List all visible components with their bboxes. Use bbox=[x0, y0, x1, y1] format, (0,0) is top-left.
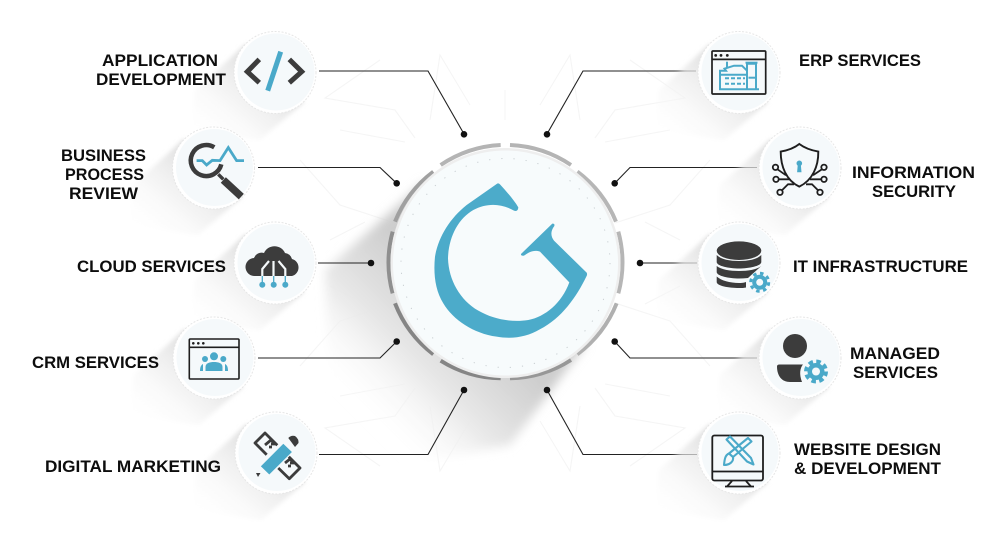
central disc shadow bbox=[325, 182, 586, 465]
label: information security: INFORMATION bbox=[852, 164, 975, 182]
service: crm services bbox=[129, 317, 255, 425]
label: crm services: CRM SERVICES bbox=[32, 354, 159, 372]
icon: person with gear bbox=[777, 334, 826, 382]
service: managed services bbox=[715, 317, 841, 425]
service: business process review bbox=[128, 127, 254, 235]
label: managed services: SERVICES bbox=[853, 364, 938, 382]
icon: magnifier with chart bbox=[191, 145, 244, 197]
service: application development bbox=[190, 32, 316, 140]
service: information security bbox=[715, 127, 841, 235]
central disc with logo bbox=[392, 149, 619, 377]
service: it infrastructure bbox=[654, 222, 780, 330]
logo: G mark bbox=[434, 183, 587, 338]
service: website design and development bbox=[654, 412, 780, 520]
service: cloud services bbox=[190, 222, 316, 330]
icon: window with factory bbox=[712, 51, 766, 94]
label: erp services: ERP SERVICES bbox=[799, 52, 921, 70]
icon: monitor with brush and pencil bbox=[712, 436, 763, 486]
icon: shield with circuits bbox=[773, 144, 827, 195]
label: digital marketing: DIGITAL MARKETING bbox=[45, 458, 221, 476]
label: information security bbox=[852, 164, 975, 201]
label: managed services bbox=[850, 345, 940, 382]
icon: code brackets bbox=[247, 52, 302, 91]
label: website design and development: WEBSITE DESIGN bbox=[794, 441, 941, 459]
label: business process review bbox=[61, 147, 146, 203]
label: application development: DEVELOPMENT bbox=[96, 71, 226, 89]
label: cloud services: CLOUD SERVICES bbox=[77, 258, 226, 276]
connector lines bbox=[258, 71, 757, 454]
label: website design and development: & DEVELOPMENT bbox=[794, 460, 941, 478]
label: application development: APPLICATION bbox=[102, 52, 218, 70]
icon: database with gear bbox=[717, 241, 771, 293]
label: business process review: BUSINESS bbox=[61, 147, 146, 165]
service: erp services bbox=[654, 32, 780, 140]
label: business process review: REVIEW bbox=[69, 185, 138, 203]
background circuit pattern bbox=[300, 55, 710, 471]
label: business process review: PROCESS bbox=[65, 166, 144, 184]
central segmented ring bbox=[389, 145, 622, 378]
icon: pencil and rulers bbox=[255, 433, 300, 479]
label: application development bbox=[96, 52, 226, 89]
icon: cloud network bbox=[245, 246, 299, 288]
icon: gear bbox=[749, 271, 771, 293]
label: information security: SECURITY bbox=[872, 183, 956, 201]
label: website design and development bbox=[794, 441, 941, 478]
label: managed services: MANAGED bbox=[850, 345, 940, 363]
icon: window with people bbox=[189, 339, 239, 379]
service: digital marketing bbox=[191, 412, 317, 520]
icon: gear bbox=[806, 362, 826, 382]
label: it infrastructure: IT INFRASTRUCTURE bbox=[793, 258, 968, 276]
